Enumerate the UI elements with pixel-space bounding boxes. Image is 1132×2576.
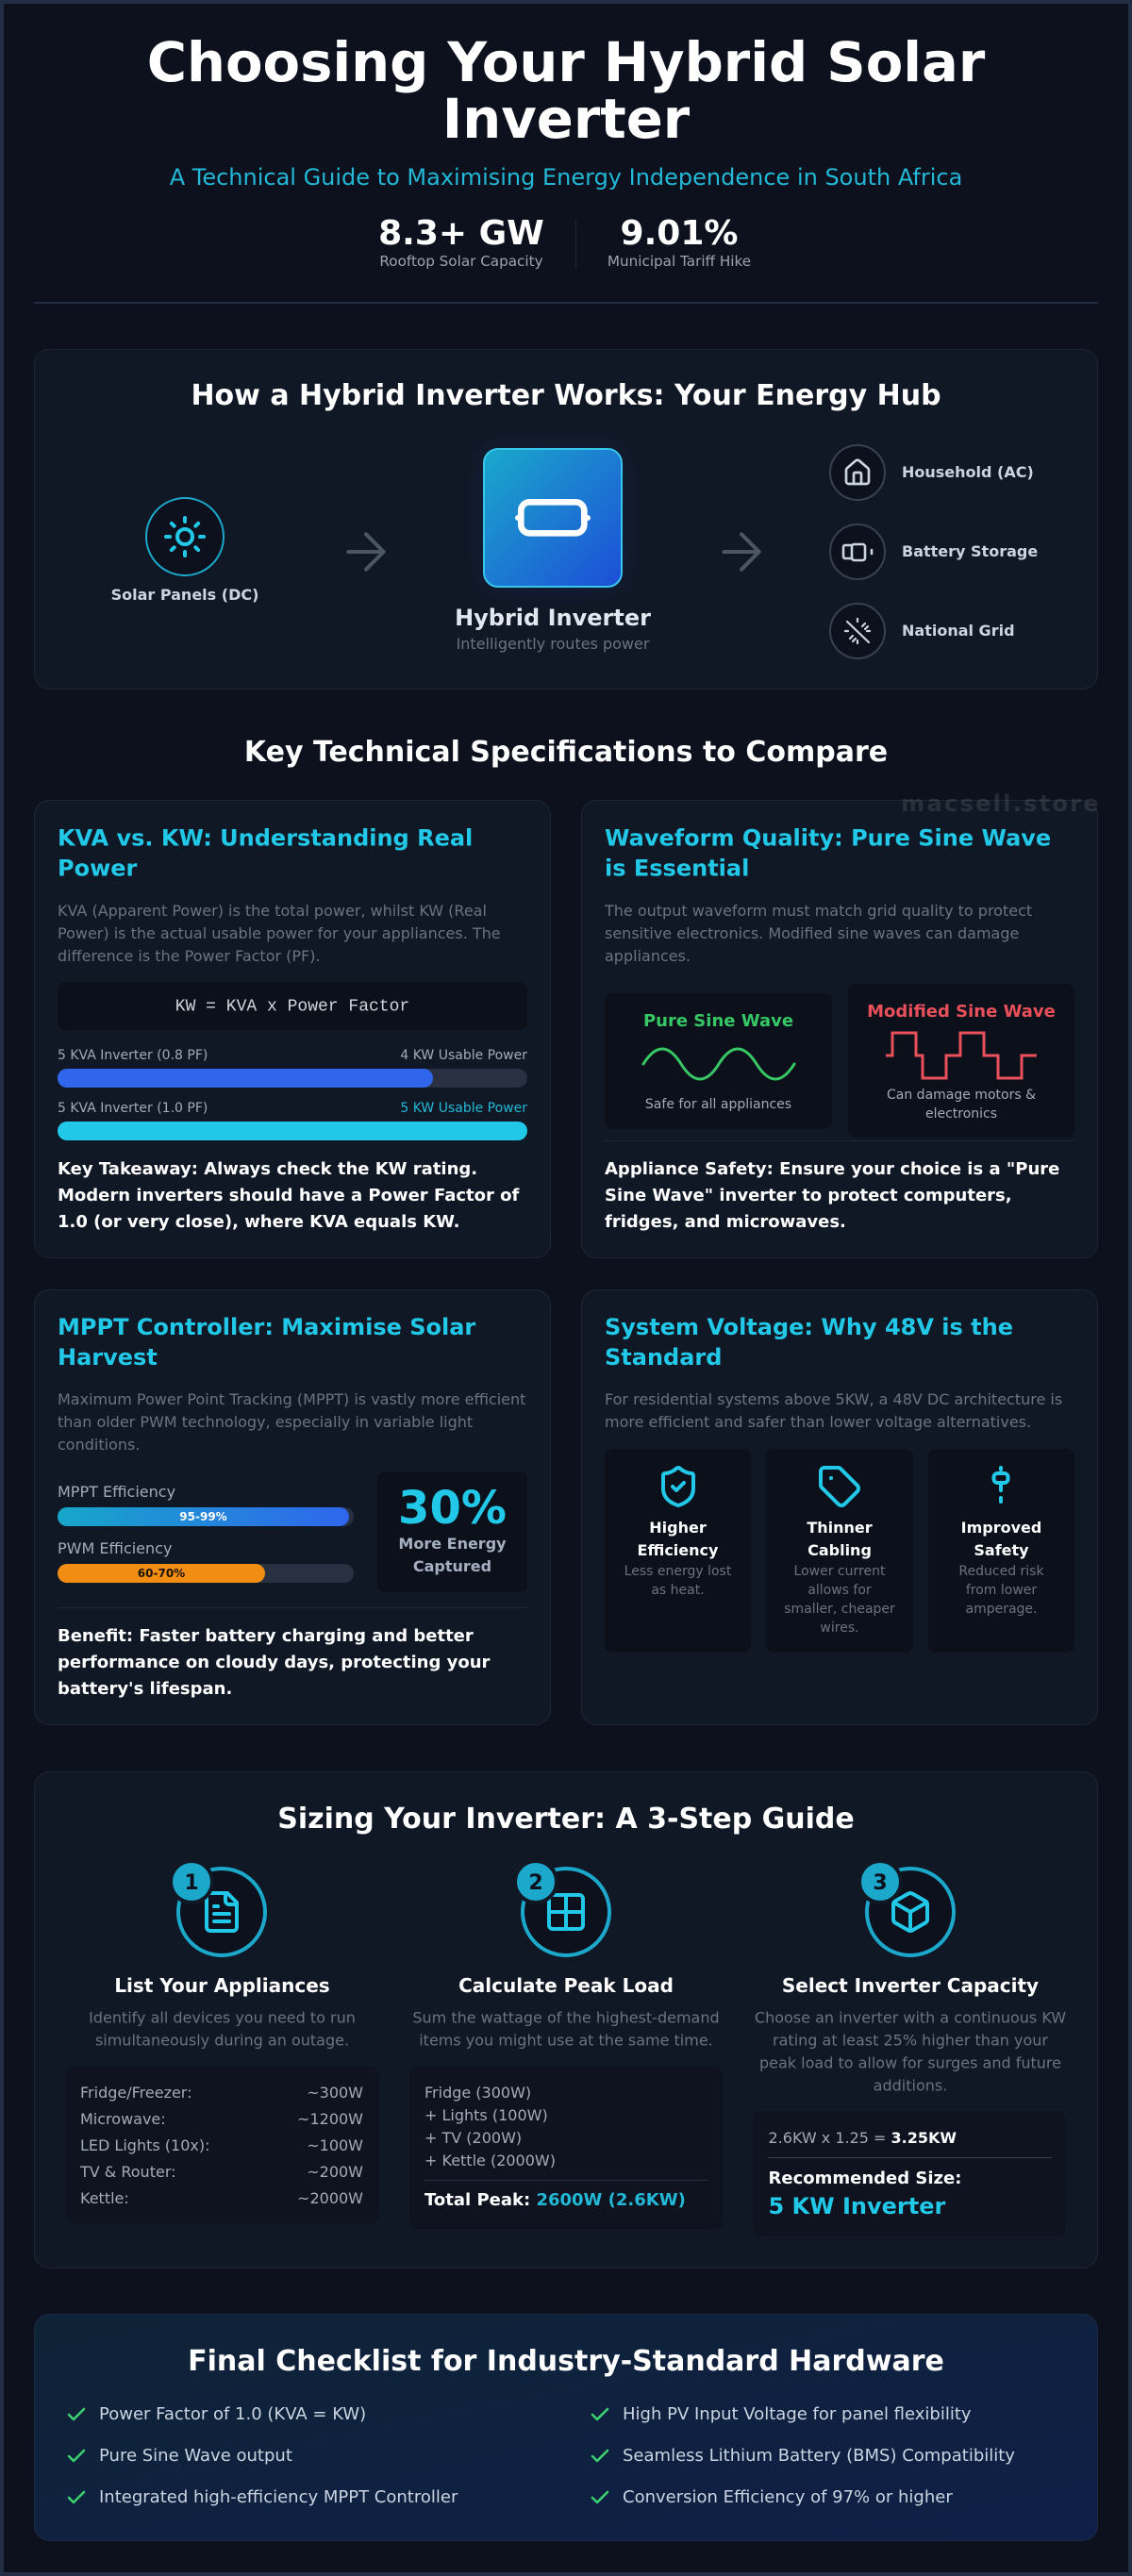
step 1 icon: 1 (184, 1871, 199, 1895)
card title (58, 824, 473, 881)
description: The output waveform must match grid quality to protect (604, 902, 1032, 920)
panel: waveform quality (581, 800, 1098, 1258)
appliance safety (605, 1159, 1059, 1232)
stat: municipal tariff hike: 9.01% (621, 214, 738, 253)
stat: 30 percent (377, 1471, 527, 1592)
panel: sizing your inverter (34, 1771, 1098, 2268)
label: hybrid inverter: Hybrid Inverter (455, 605, 651, 631)
card title: is Essential (605, 855, 749, 881)
key takeaway: 1.0 (or very close), where KVA equals KW. (58, 1212, 459, 1232)
appliance list: Fridge/Freezer: (80, 2084, 192, 2102)
step 1: simultaneously during an outage. (95, 2032, 349, 2049)
description (58, 902, 501, 965)
benefit: battery's lifespan. (58, 1679, 232, 1699)
heading: key technical specifications: Key Technical Specifications to Compare (244, 736, 888, 769)
key takeaway: Key Takeaway: Always check the KW rating. (58, 1159, 477, 1179)
step 2 icon: 2 (528, 1871, 543, 1895)
checklist right: High PV Input Voltage for panel flexibility (623, 2404, 972, 2424)
step 2: Calculate Peak Load (458, 1974, 674, 1997)
title: Choosing Your Hybrid Solar (147, 31, 986, 94)
heading: energy hub: How a Hybrid Inverter Works: Your Energy Hub (191, 379, 941, 412)
checklist right (592, 2404, 1015, 2507)
bar: MPPT efficiency: MPPT Efficiency (58, 1483, 175, 1501)
description: difference is the Power Factor (PF). (58, 947, 321, 965)
description (58, 1390, 525, 1454)
bar: MPPT efficiency: 95-99% (179, 1510, 227, 1523)
step 1 (66, 1861, 379, 2223)
card title: Standard (605, 1344, 722, 1371)
step 1: Identify all devices you need to run (89, 2009, 356, 2026)
benefit: thinner cabling: allows for (807, 1583, 872, 1598)
output: national grid (830, 604, 1015, 658)
card title: Power (58, 855, 138, 881)
benefit: improved safety: Improved (961, 1519, 1041, 1537)
step 3: Select Inverter Capacity (782, 1974, 1039, 1997)
card title (605, 1314, 1013, 1371)
appliance safety: fridges, and microwaves. (605, 1212, 846, 1232)
step 2: Sum the wattage of the highest-demand (412, 2009, 720, 2026)
step 1 icon (171, 1861, 265, 1955)
appliance list: TV & Router: (79, 2163, 175, 2181)
appliance list: Kettle: (80, 2189, 129, 2207)
step 2 icon (515, 1861, 609, 1955)
label: solar panels: Solar Panels (DC) (111, 586, 258, 604)
benefit: thinner cabling (766, 1449, 913, 1653)
bar: 1.0 PF: 5 KW Usable Power (400, 1101, 527, 1116)
formula box (58, 982, 527, 1030)
bar: 0.8 PF (58, 1048, 527, 1088)
description (604, 902, 1032, 965)
appliance list (66, 2067, 379, 2223)
stat: 30 percent: Captured (413, 1557, 491, 1575)
benefit: thinner cabling: Lower current (794, 1564, 886, 1579)
benefit: higher efficiency: as heat. (651, 1583, 705, 1598)
step 2: items you might use at the same time. (419, 2032, 713, 2049)
benefit: thinner cabling: Thinner (807, 1519, 873, 1537)
peak load calculation (409, 2067, 723, 2229)
stat: rooftop solar capacity: Rooftop Solar Capacity (379, 253, 543, 270)
formula box: KW = KVA x Power Factor (175, 998, 409, 1017)
key takeaway (58, 1159, 519, 1232)
recommended size: 2.6KW x 1.25 = 3.25KW (768, 2129, 957, 2147)
modified sine wave box: Can damage motors & (887, 1088, 1036, 1103)
pure sine wave box: Pure Sine Wave (643, 1011, 793, 1031)
recommended size: Recommended Size: (768, 2169, 961, 2188)
appliance safety: Appliance Safety: Ensure your choice is a "Pure (605, 1159, 1059, 1179)
benefit: improved safety: amperage. (965, 1602, 1038, 1617)
description: than older PWM technology, especially in variable light (58, 1413, 473, 1431)
label: hybrid inverter (455, 605, 651, 653)
output: national grid: National Grid (902, 622, 1015, 640)
stat: 30 percent: 30% (398, 1482, 507, 1535)
checklist right: Seamless Lithium Battery (BMS) Compatibility (623, 2446, 1015, 2466)
step 3: additions. (874, 2077, 947, 2094)
card title: Harvest (58, 1344, 158, 1371)
bar: 1.0 PF (58, 1101, 527, 1140)
appliance list: ~300W (307, 2084, 363, 2102)
card title (58, 1314, 475, 1371)
panel: how a hybrid inverter works (34, 349, 1098, 689)
benefit: improved safety: Reduced risk (958, 1564, 1044, 1579)
stat: 30 percent: More Energy (398, 1535, 507, 1553)
step 3: rating at least 25% higher than your (773, 2032, 1048, 2049)
icon: inverter (518, 502, 588, 533)
peak load calculation: + Lights (100W) (424, 2106, 548, 2124)
checklist left: Pure Sine Wave output (99, 2446, 292, 2466)
benefit: performance on cloudy days, protecting your (58, 1653, 491, 1672)
modified sine wave box: electronics (925, 1106, 997, 1122)
benefit: thinner cabling: Cabling (807, 1541, 872, 1559)
peak load calculation: Total Peak: 2600W (2.6KW) (424, 2190, 686, 2210)
peak load calculation: + TV (200W) (424, 2129, 522, 2147)
stat: rooftop solar capacity (378, 214, 544, 270)
benefit: improved safety (928, 1449, 1074, 1653)
key takeaway: Modern inverters should have a Power Factor of (58, 1186, 519, 1205)
appliance list: ~2000W (297, 2189, 363, 2207)
step 1: List Your Appliances (114, 1974, 330, 1997)
bar: PWM efficiency: PWM Efficiency (58, 1539, 172, 1557)
bar: 0.8 PF: 5 KVA Inverter (0.8 PF) (58, 1048, 208, 1063)
appliance safety: Sine Wave" inverter to protect computers, (605, 1186, 1012, 1205)
recommended size: 5 KW Inverter (768, 2193, 946, 2219)
benefit: higher efficiency (605, 1449, 751, 1653)
recommended size (753, 2111, 1066, 2236)
arrow: solar to inverter (348, 534, 384, 570)
title (147, 31, 986, 151)
bar: 1.0 PF: 5 KVA Inverter (1.0 PF) (58, 1101, 208, 1116)
benefit: higher efficiency: Less energy lost (624, 1564, 732, 1579)
modified sine wave box (848, 984, 1074, 1138)
description: sensitive electronics. Modified sine waves can damage (605, 924, 1019, 942)
description: For residential systems above 5KW, a 48V DC architecture is (605, 1390, 1062, 1408)
checklist left: Power Factor of 1.0 (KVA = KW) (99, 2404, 366, 2424)
appliance list: Microwave: (80, 2110, 166, 2128)
appliance list: LED Lights (10x): (80, 2136, 209, 2154)
card title (605, 824, 1051, 881)
checklist left: Integrated high-efficiency MPPT Controller (99, 2487, 458, 2507)
output: household: Household (AC) (902, 463, 1034, 481)
inverter hub box (483, 448, 623, 588)
card title: Waveform Quality: Pure Sine Wave (605, 824, 1051, 851)
output: battery storage (830, 524, 1038, 579)
modified sine wave box: Modified Sine Wave (867, 1002, 1056, 1022)
panel: system voltage (581, 1290, 1098, 1724)
benefit: thinner cabling: smaller, cheaper (784, 1602, 895, 1617)
subtitle: A Technical Guide to Maximising Energy Independence in South Africa (170, 164, 962, 191)
peak load calculation: + Kettle (2000W) (424, 2152, 556, 2169)
bar: 0.8 PF: 4 KW Usable Power (400, 1048, 527, 1063)
pure sine wave box (605, 993, 832, 1129)
benefit (58, 1626, 491, 1699)
description: more efficient and safer than lower voltage alternatives. (605, 1413, 1031, 1431)
description: appliances. (605, 947, 691, 965)
peak load calculation: Fridge (300W) (424, 2084, 531, 2102)
stat: municipal tariff hike: Municipal Tariff Hike (608, 253, 751, 270)
label: hybrid inverter: Intelligently routes power (457, 635, 650, 653)
benefit: higher efficiency: Higher (649, 1519, 707, 1537)
watermark: macsell.store (901, 790, 1101, 817)
panel: MPPT controller (34, 1290, 551, 1724)
benefit: higher efficiency: Efficiency (638, 1541, 719, 1559)
benefit: improved safety: from lower (966, 1583, 1037, 1598)
appliance list: ~100W (307, 2136, 363, 2154)
description: Power) is the actual usable power for your appliances. The (58, 924, 501, 942)
appliance list: ~1200W (297, 2110, 363, 2128)
appliance list: ~200W (307, 2163, 363, 2181)
bar: PWM efficiency (58, 1539, 354, 1583)
panel: KVA vs KW (34, 800, 551, 1258)
description (605, 1390, 1062, 1431)
pure sine wave box: Safe for all appliances (645, 1097, 791, 1112)
card title: MPPT Controller: Maximise Solar (58, 1314, 475, 1340)
arrow: inverter to outputs (724, 534, 759, 570)
description: conditions. (58, 1436, 140, 1454)
heading: sizing guide: Sizing Your Inverter: A 3-Step Guide (277, 1803, 855, 1836)
card title: KVA vs. KW: Understanding Real (58, 824, 473, 851)
step 3: Choose an inverter with a continuous KW (755, 2009, 1066, 2026)
bar: PWM efficiency: 60-70% (138, 1567, 185, 1580)
description: KVA (Apparent Power) is the total power, whilst KW (Real (58, 902, 487, 920)
benefit: Benefit: Faster battery charging and better (58, 1626, 474, 1646)
step 3 icon (859, 1861, 954, 1955)
stat: municipal tariff hike (608, 214, 751, 270)
step 3 icon: 3 (873, 1871, 888, 1895)
heading: final checklist: Final Checklist for Industry-Standard Hardware (188, 2345, 944, 2378)
benefit: improved safety: Safety (974, 1541, 1029, 1559)
checklist right: Conversion Efficiency of 97% or higher (623, 2487, 953, 2507)
description: Maximum Power Point Tracking (MPPT) is vastly more efficient (58, 1390, 525, 1408)
step 2 (409, 1861, 723, 2229)
step 3: peak load to allow for surges and future (759, 2054, 1061, 2071)
card title: System Voltage: Why 48V is the (605, 1314, 1013, 1340)
icon: solar panels (146, 498, 224, 575)
stat: rooftop solar capacity: 8.3+ GW (378, 214, 544, 253)
panel: final checklist (34, 2315, 1098, 2541)
output: household (830, 445, 1034, 500)
benefit: thinner cabling: wires. (820, 1620, 859, 1636)
checklist left (69, 2404, 458, 2507)
bar: MPPT efficiency (58, 1483, 354, 1526)
header (34, 31, 1098, 304)
step 3 (753, 1861, 1066, 2236)
title: Inverter (442, 88, 691, 151)
output: battery storage: Battery Storage (902, 542, 1038, 560)
